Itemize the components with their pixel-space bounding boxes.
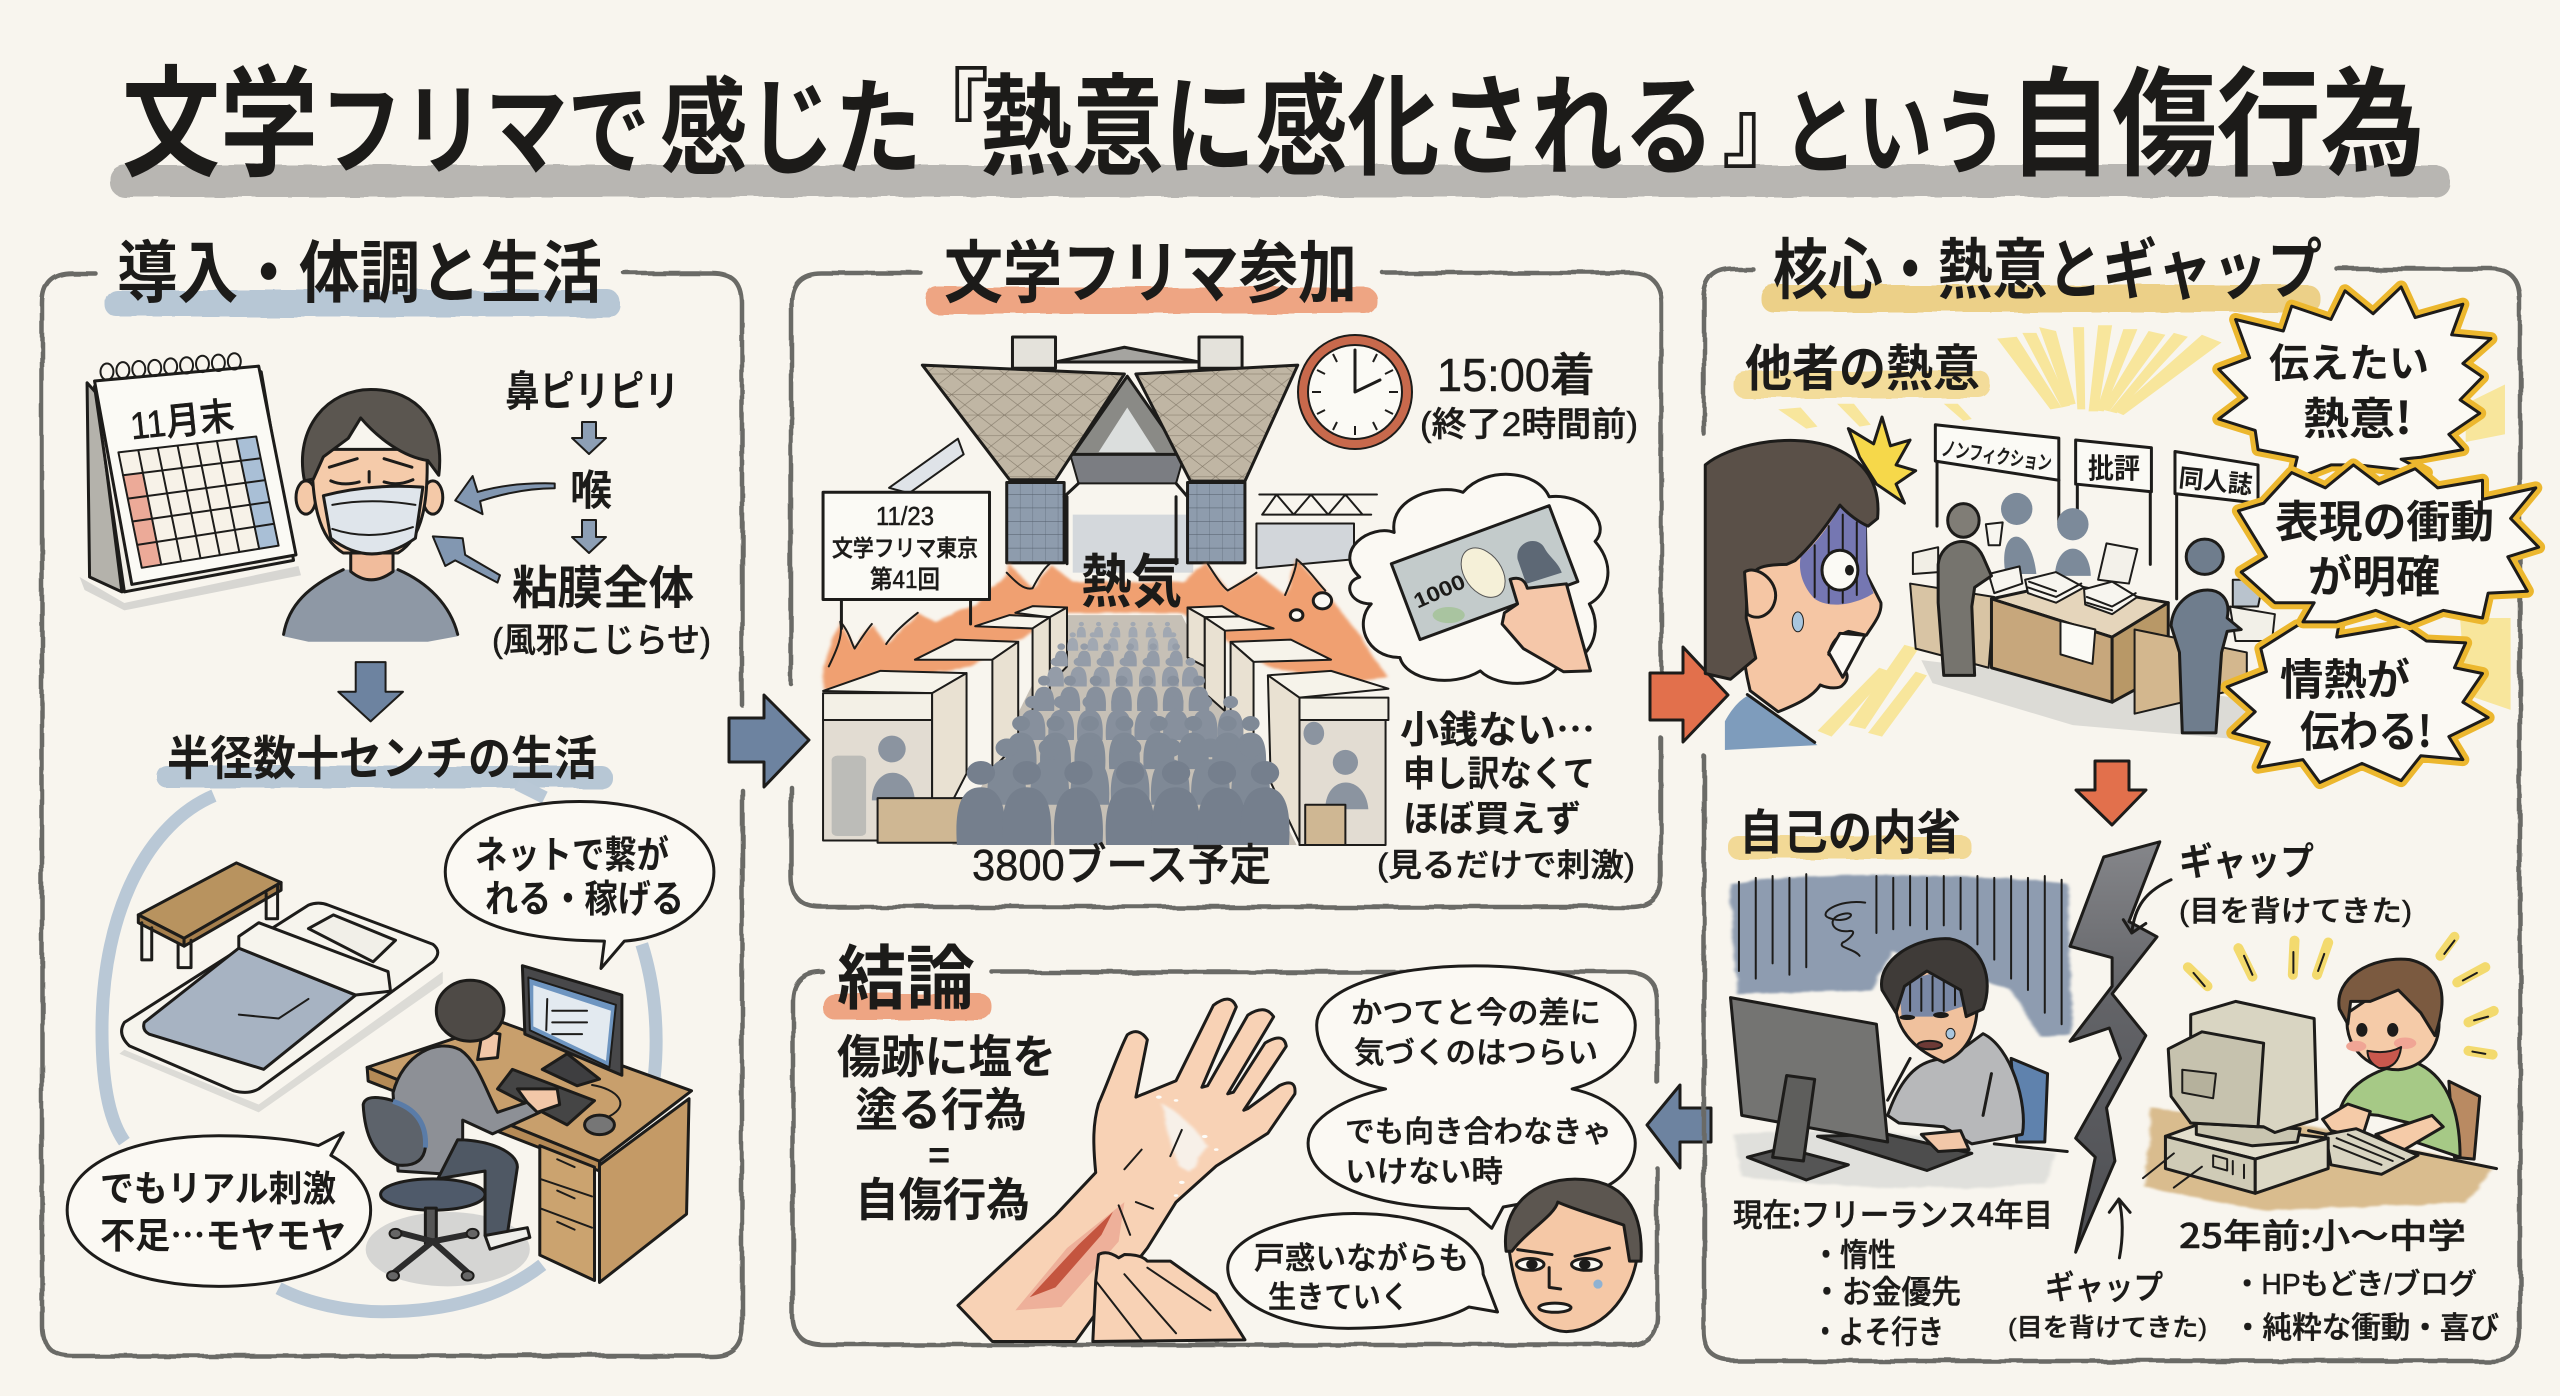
text: present status list bbox=[1733, 1190, 2053, 1350]
speech bubble: net connection bbox=[445, 802, 714, 968]
heading: 他者の熱意: 他者の熱意 bbox=[1745, 341, 1980, 397]
illustration: present self at monitor bbox=[1731, 874, 2073, 1188]
title: という bbox=[1782, 81, 2008, 186]
text: no small change: ほぼ買えず bbox=[1403, 798, 1581, 839]
speech burst: passion is conveyed: 伝わる! bbox=[2300, 698, 2432, 760]
speech bubble: live on: 戸惑いながらも bbox=[1254, 1241, 1469, 1276]
heading: 核心・熱意とギャップ: 核心・熱意とギャップ bbox=[1773, 233, 2322, 307]
text: conclusion statement: 自傷行為 bbox=[855, 1174, 1030, 1226]
illustration: wounded hand and salt bbox=[958, 999, 1295, 1341]
text: conclusion statement: 塗る行為 bbox=[855, 1084, 1027, 1136]
heading: 導入・体調と生活: 導入・体調と生活 bbox=[117, 236, 602, 312]
heading: 結論: 結論 bbox=[837, 940, 975, 1018]
text: present status list: ・よそ行き bbox=[1812, 1314, 1944, 1350]
text: symptom chain: 粘膜全体 bbox=[512, 562, 694, 614]
text: 3800 booths: 3800ブース予定 bbox=[972, 841, 1271, 890]
arrow: panel 2 to panel 4 bbox=[1650, 647, 1728, 742]
illustration: booths with genre signs bbox=[1910, 425, 2275, 740]
text: 25 years ago list: 25年前:小〜中学 bbox=[2179, 1209, 2466, 1258]
panel: bunfree participation bbox=[791, 236, 1661, 907]
text: 25 years ago list: ・HPもどき/ブログ bbox=[2233, 1268, 2477, 1301]
speech bubble: lack of real stimulation: でもリアル刺激 bbox=[100, 1168, 336, 1209]
label: gap lower: ギャップ bbox=[2045, 1269, 2163, 1306]
illustration: shocked head in profile bbox=[1705, 417, 1916, 750]
icon: clock bbox=[1298, 335, 1412, 449]
arrow: big down bbox=[338, 662, 403, 721]
text: conclusion statement bbox=[837, 1031, 1056, 1226]
speech bubble: lack of real stimulation bbox=[67, 1133, 371, 1286]
illustration: yellow light rays bbox=[1778, 325, 2511, 737]
arrow: orange down bbox=[2076, 761, 2146, 825]
sign: event info: 第41回 bbox=[870, 566, 940, 594]
sign: event info: 文学フリマ東京 bbox=[832, 535, 978, 561]
illustration: lightning gap bbox=[2070, 842, 2160, 1252]
title: 熱意に感化される bbox=[980, 67, 1715, 190]
icon: calendar: 11月末 bbox=[128, 396, 236, 448]
text: 25 years ago list: ・純粋な衝動・喜び bbox=[2233, 1312, 2499, 1345]
text: present status list: 現在:フリーランス4年目 bbox=[1733, 1190, 2053, 1236]
illustration: booths with genre signs: 同人誌 bbox=[2177, 464, 2254, 500]
speech burst: passion to convey: 熱意! bbox=[2303, 383, 2412, 447]
thought bubble: 1000 yen note in hand bbox=[1290, 474, 1608, 683]
illustration: big sight building bbox=[889, 337, 1377, 573]
speech bubble: live on: 生きていく bbox=[1268, 1280, 1409, 1315]
arrow: symptom down 2 bbox=[572, 520, 606, 553]
speech burst: passion to convey bbox=[2219, 287, 2491, 480]
speech bubble: gap realisation and facing it: でも向き合わなきゃ bbox=[1345, 1116, 1612, 1149]
title: 感じた bbox=[660, 71, 922, 189]
sign: event info: 11/23 bbox=[876, 501, 934, 531]
speech burst: passion is conveyed bbox=[2227, 622, 2488, 783]
heading: 半径数十センチの生活: 半径数十センチの生活 bbox=[167, 732, 597, 785]
text: symptom chain: 喉 bbox=[570, 467, 612, 514]
thought bubble: 1000 yen note in hand: 1000 bbox=[1410, 570, 1469, 613]
text: symptom chain: (風邪こじらせ) bbox=[492, 622, 711, 660]
icon: sick masked person bbox=[284, 389, 458, 642]
speech bubble: net connection: れる・稼げる bbox=[485, 879, 684, 921]
panel: intro, health and life bbox=[42, 236, 742, 1356]
text: no small change: 申し訳なくて bbox=[1403, 753, 1595, 794]
speech bubble: gap realisation and facing it bbox=[1308, 966, 1635, 1228]
arrow: panel 1 to panel 2 bbox=[729, 695, 809, 787]
speech burst: clear urge of expression bbox=[2238, 465, 2539, 624]
illustration: flames of heat bbox=[823, 559, 1386, 689]
speech burst: passion to convey: 伝えたい bbox=[2269, 342, 2429, 386]
text: present status list: ・惰性 bbox=[1812, 1237, 1896, 1273]
text: symptom chain bbox=[492, 368, 711, 660]
text: arrival time bbox=[1420, 349, 1638, 444]
label: gap upper bbox=[2123, 842, 2412, 933]
speech bubble: live on bbox=[1228, 1214, 1498, 1328]
text: symptom chain: 鼻ピリピリ bbox=[505, 368, 679, 415]
label: gap upper: (目を背けてきた) bbox=[2179, 895, 2412, 928]
title: フリマで bbox=[320, 76, 650, 188]
text: no small change: 小銭ない… bbox=[1400, 699, 1595, 754]
illustration: troubled face bbox=[1505, 1179, 1641, 1332]
text: no small change bbox=[1377, 699, 1635, 883]
icon: calendar bbox=[80, 353, 301, 610]
speech bubble: gap realisation and facing it: かつてと今の差に bbox=[1351, 997, 1601, 1030]
heading: 自己の内省: 自己の内省 bbox=[1739, 807, 1961, 860]
label: gap upper: ギャップ bbox=[2179, 842, 2314, 884]
text: arrival time: 15:00着 bbox=[1437, 349, 1595, 401]
title: 文学 bbox=[122, 58, 318, 192]
illustration: booths with genre signs: 批評 bbox=[2088, 453, 2140, 484]
title: 『 bbox=[905, 62, 989, 156]
arrow: panel 4 to conclusion bbox=[1647, 1085, 1711, 1168]
speech bubble: net connection: ネットで繋が bbox=[475, 835, 669, 877]
text: arrival time: (終了2時間前) bbox=[1420, 406, 1638, 444]
text: 25 years ago list bbox=[2179, 1209, 2499, 1345]
label: gap lower bbox=[2008, 1269, 2207, 1342]
arrow: throat to person bbox=[455, 476, 555, 514]
speech burst: passion is conveyed: 情熱が bbox=[2280, 657, 2410, 705]
sign: event info bbox=[823, 492, 990, 628]
text: 熱気: 熱気 bbox=[1081, 550, 1182, 615]
text: present status list: ・お金優先 bbox=[1812, 1274, 1961, 1310]
arrow: thin up to gap bbox=[2109, 1199, 2130, 1258]
title bbox=[110, 58, 2450, 197]
illustration: booths with genre signs: ノンフィクション bbox=[1940, 437, 2053, 476]
panel: conclusion bbox=[793, 940, 1657, 1345]
illustration: younger self with CRT bbox=[2143, 937, 2497, 1210]
speech burst: clear urge of expression: が明確 bbox=[2308, 553, 2440, 602]
speech bubble: lack of real stimulation: 不足…モヤモヤ bbox=[100, 1207, 346, 1259]
text: conclusion statement: 傷跡に塩を bbox=[837, 1031, 1056, 1083]
speech bubble: gap realisation and facing it: いけない時 bbox=[1345, 1156, 1503, 1189]
label: gap lower: (目を背けてきた) bbox=[2008, 1314, 2207, 1342]
panel: core, passion and gap bbox=[1704, 233, 2539, 1361]
title: 自傷行為 bbox=[2008, 60, 2425, 192]
arrow: symptom down 1 bbox=[572, 422, 606, 454]
text: conclusion statement: = bbox=[928, 1135, 950, 1177]
illustration: booths and crowd bbox=[823, 606, 1388, 845]
arrow: mucosa to person bbox=[433, 536, 500, 583]
speech burst: clear urge of expression: 表現の衝動 bbox=[2275, 498, 2494, 547]
heading: 文学フリマ参加: 文学フリマ参加 bbox=[944, 236, 1357, 312]
text: no small change: (見るだけで刺激) bbox=[1377, 847, 1635, 883]
title: 』 bbox=[1722, 84, 1806, 178]
illustration: small living circle with futon and desk bbox=[102, 784, 692, 1312]
speech bubble: gap realisation and facing it: 気づくのはつらい bbox=[1354, 1037, 1598, 1070]
